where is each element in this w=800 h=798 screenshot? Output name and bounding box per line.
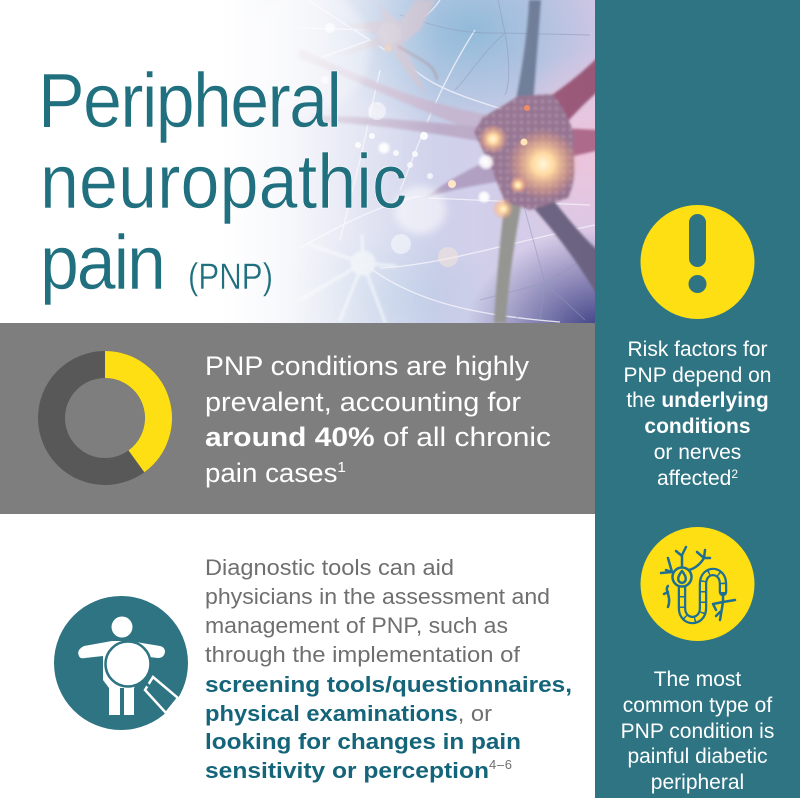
faint lower neuron (328, 235, 396, 323)
donut chart: 40% (52, 364, 158, 472)
diagnostic tools text: 4–6 (489, 757, 512, 772)
title: (PNP) (188, 256, 273, 297)
risk factors text: Risk factors for (627, 338, 768, 361)
glowing sparks (321, 23, 579, 267)
hero image: neurons (283, 0, 595, 323)
prevalence text: around 40% of all chronic (205, 422, 551, 452)
diagnostic tools text: physicians in the assessment and (205, 584, 550, 609)
diagnostic tools text (205, 555, 572, 783)
panel: prevalence band (0, 323, 595, 514)
risk factors text (624, 338, 771, 490)
risk factors text: PNP depend on (624, 364, 771, 387)
most common type text: peripheral (651, 771, 744, 794)
most common type text: common type of (623, 694, 772, 717)
icon: neuron (640, 527, 754, 641)
diagnostic tools text: through the implementation of (205, 642, 521, 667)
prevalence text: 1 (337, 459, 346, 476)
most common type text: painful diabetic (627, 745, 768, 768)
risk factors text: affected (657, 467, 731, 490)
prevalence text (205, 351, 551, 488)
risk factors text: conditions (644, 415, 751, 438)
icon: exclamation mark (640, 205, 754, 319)
title: Peripheral (38, 57, 342, 144)
risk factors text: or nerves (654, 441, 741, 464)
prevalence text: prevalent, accounting for (205, 387, 521, 417)
title (38, 57, 407, 306)
diagnostic tools text: looking for changes in pain (205, 729, 521, 754)
risk factors text: the underlying (626, 389, 769, 412)
diagnostic tools text: Diagnostic tools can aid (205, 555, 454, 580)
title: pain (40, 219, 166, 306)
diagnostic tools text: management of PNP, such as (205, 613, 508, 638)
title: neuropathic (40, 138, 407, 225)
prevalence text: pain cases (205, 458, 334, 488)
main neuron (298, 0, 600, 323)
upper neuron (355, 0, 439, 92)
most common type text: PNP condition is (621, 720, 774, 743)
prevalence text: PNP conditions are highly (205, 351, 530, 381)
icon: person under magnifying glass (54, 596, 188, 730)
diagnostic tools text: physical examinations , or (205, 701, 492, 726)
diagnostic tools text: sensitivity or perception (205, 758, 489, 783)
most common type text (621, 668, 774, 794)
risk factors text: 2 (731, 467, 738, 481)
most common type text: The most (654, 668, 741, 691)
panel: right column (595, 0, 800, 798)
diagnostic tools text: screening tools/questionnaires, (205, 672, 572, 697)
